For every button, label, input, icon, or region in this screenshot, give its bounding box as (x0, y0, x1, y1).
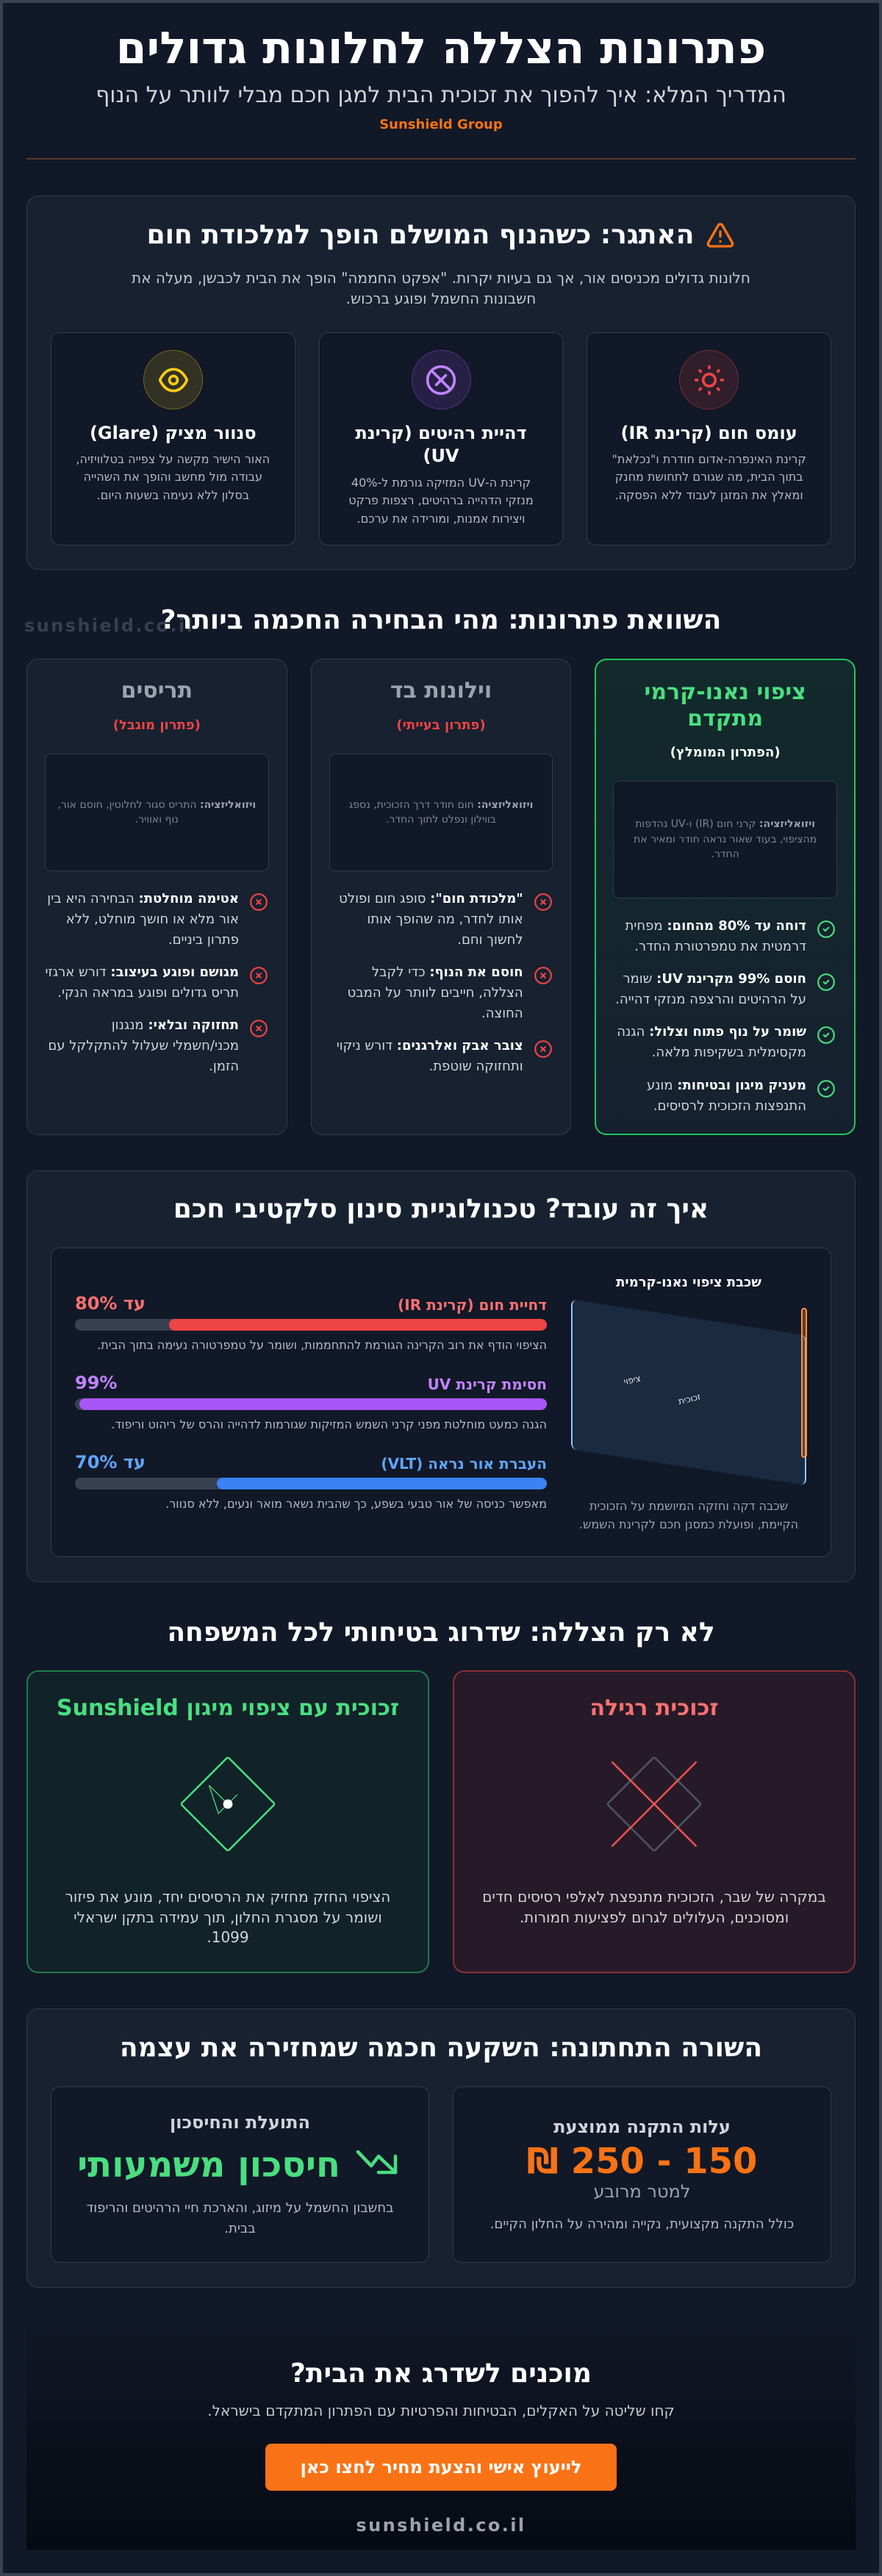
diagram caption: שכבה דקה וחזקה המיושמת על הזכוכית (589, 1499, 788, 1513)
visualization placeholder: ויזואליזציה: חום חודר דרך הזכוכית, נספג (349, 799, 533, 811)
metric: UV blocking (75, 1373, 547, 1431)
benefit (647, 1078, 835, 1114)
title: פתרונות הצללה לחלונות גדולים (116, 23, 766, 74)
metric text: מאפשר כניסה של אור טבעי בשפע, כך שהבית נשאר מואר ונעים, ללא סנוור. (165, 1497, 547, 1511)
visualization placeholder: ויזואליזציה: קרני חום (IR) ו-UV נהדפות (635, 818, 815, 830)
coating bar (801, 1308, 807, 1458)
benefit: מעניק מיגון ובטיחות: מונע (647, 1078, 806, 1093)
savings label: התועלת והחיסכון (170, 2112, 310, 2133)
website: sunshield.co.il (356, 2515, 526, 2536)
progress bar (75, 1478, 547, 1489)
drawback: תריס גדולים ופוגע במראה הנקי. (57, 985, 239, 1001)
benefit (625, 918, 835, 954)
card: heat load (587, 332, 831, 545)
icon: sun (679, 350, 739, 409)
drawback: לחשוך וחם. (457, 932, 523, 948)
benefit: מקסימלית בשקיפות מלאה. (652, 1045, 806, 1060)
panel text: ומסוכנים, העלולים לגרום לפציעות חמורות. (520, 1908, 789, 1926)
heading: safety: לא רק הצללה: שדרוג בטיחותי לכל המשפחה (167, 1617, 715, 1647)
metric label: חסימת קרינת UV (428, 1375, 547, 1393)
visualization placeholder: מהציפוי, בעוד שאור נראה חודר ומאיר את (634, 834, 817, 845)
column title: מתקדם (687, 706, 763, 731)
progress bar (75, 1319, 547, 1331)
drawback (47, 891, 268, 948)
column subtitle: (פתרון מוגבל) (113, 718, 201, 733)
metric text: הציפוי הודף את רוב הקרינה הגורמת להתחממות, ושומר על טמפרטורה נעימה בתוך הבית. (97, 1338, 547, 1352)
inner card (51, 1248, 831, 1557)
intro text (132, 269, 750, 307)
CTA heading: מוכנים לשדרג את הבית? (290, 2358, 592, 2389)
column subtitle: (פתרון בעייתי) (396, 718, 486, 733)
drawback (339, 891, 552, 948)
cost unit: למטר מרובע (594, 2181, 690, 2202)
icon: eye (143, 350, 203, 409)
column title: תריסים (121, 678, 193, 704)
label: glass: זכוכית (677, 1392, 702, 1406)
cost note: כולל התקנה מקצועית, נקייה ומהירה על החלון הקיים. (490, 2217, 794, 2232)
panel title: זכוכית רגילה (589, 1695, 719, 1721)
drawback: פתרון ביניים. (168, 932, 239, 948)
drawback: הזמן. (209, 1059, 239, 1074)
card text: בסלון ללא נעימה בשעות היום. (97, 488, 249, 502)
savings note (86, 2200, 394, 2236)
benefit: התנפצות הזכוכית לרסיסים. (653, 1098, 806, 1114)
benefit: על הרהיטים והרצפה מנזקי דהייה. (615, 992, 806, 1007)
divider (26, 158, 856, 160)
card title (355, 423, 527, 466)
benefit: דוחה עד 80% מהחום: מפחית (625, 918, 806, 934)
drawback: אור מלא או חושך מוחלט, ללא (66, 912, 239, 927)
drawback: החוצה. (481, 1006, 523, 1021)
drawback: תחזוקה ובלאי: מנגנון (112, 1017, 239, 1033)
savings note: בבית. (224, 2221, 256, 2236)
benefit (617, 1024, 835, 1060)
visualization placeholder: ויזואליזציה: התריס סגור לחלוטין, חוסם אור, (57, 799, 256, 811)
metric: heat rejection (75, 1293, 547, 1352)
column title: ציפוי נאנו-קרמי (645, 679, 806, 705)
icon: trending down (356, 2150, 397, 2175)
drawback: "מלכודת חום": סופג חום ופולט (339, 891, 523, 906)
panel text: 1099. (207, 1928, 249, 1946)
heading: ROI: השורה התחתונה: השקעה חכמה שמחזירה את עצמה (120, 2033, 762, 2063)
card text (348, 476, 534, 526)
metric label: העברת אור נראה (VLT) (381, 1455, 547, 1473)
watermark: sunshield.co.il (24, 615, 194, 636)
drawback: אותו לחדר, מה שהופך אותו (367, 912, 523, 927)
card text: ומאלץ את המזגן לעבוד ללא הפסקה. (615, 488, 803, 502)
card text: האור הישיר מקשה על צפייה בטלוויזיה, (76, 452, 270, 466)
benefit: שומר על נוף פתוח וצלול: הגנה (617, 1024, 806, 1040)
brand: Sunshield Group (379, 117, 503, 132)
panel text: הציפוי החזק מחזיק את הרסיסים יחד, מונע את פיזור (65, 1888, 390, 1906)
diagram caption (579, 1499, 798, 1531)
panel: regular glass (453, 1670, 856, 1973)
visualization placeholder: בווילון ונפלט לתוך החדר. (386, 814, 496, 826)
card text (612, 452, 806, 502)
card: glare (51, 332, 295, 545)
card title: סנוור מציק (Glare) (90, 423, 257, 443)
panel text: במקרה של שבר, הזכוכית מתנפצת לאלפי רסיסים חדים (482, 1888, 826, 1906)
panel text (65, 1888, 390, 1946)
card title: דהיית רהיטים (קרינת (355, 423, 527, 443)
drawback (337, 1038, 552, 1074)
heading: threat (147, 220, 734, 250)
panel: curtains (311, 659, 571, 1135)
heading: technology: איך זה עובד? טכנולוגיית סינון סלקטיבי חכם (173, 1194, 709, 1224)
drawback (348, 965, 552, 1021)
diagram: glass layers (571, 1300, 807, 1485)
card text: קרינת האינפרה-אדום חודרת ו"נכלאת" (612, 452, 806, 466)
metric label: דחיית חום (קרינת IR) (398, 1296, 547, 1314)
intro text: חלונות גדולים מכניסים אור, אך גם בעיות יקרות. "אפקט החממה" הופך את הבית לכבשן, מעלה את (132, 269, 750, 287)
panel: call to action (26, 2311, 856, 2550)
diagram title: שכבת ציפוי נאנו-קרמית (616, 1275, 761, 1289)
cost label: עלות התקנה ממוצעת (553, 2117, 731, 2137)
progress bar (75, 1398, 547, 1410)
drawback: מכני/חשמלי שעלול להתקלקל עם (48, 1038, 239, 1053)
savings value: חיסכון משמעותי (77, 2144, 340, 2186)
icon: intact glass (181, 1757, 275, 1851)
card title: UV) (423, 446, 459, 466)
column title (645, 679, 806, 731)
card text: עבודה מול מחשב והופך את השהייה (84, 470, 262, 484)
icon: shattered glass (607, 1757, 701, 1851)
card text: מנזקי הדהייה ברהיטים, רצפות פרקט (348, 493, 534, 507)
card title: עומס חום (קרינת IR) (621, 423, 797, 443)
drawback: אטימה מוחלטת: הבחירה היא בין (47, 891, 239, 906)
metric text: הגנה כמעט מוחלטת מפני קרני השמש המזיקות שגורמות לדהייה והרס של ריהוט וריפוד. (111, 1417, 547, 1431)
card: cost (453, 2086, 831, 2263)
metric: visible light (75, 1452, 547, 1511)
drawback: צובר אבק ואלרגנים: דורש ניקוי (337, 1038, 523, 1053)
CTA button: לייעוץ אישי והצעת מחיר לחצו כאן (301, 2457, 581, 2477)
header (26, 23, 856, 160)
visualization placeholder (613, 781, 837, 898)
drawback (48, 1017, 268, 1074)
cost value: 150 - 250 ₪ (527, 2141, 757, 2182)
card: savings (51, 2086, 429, 2263)
visualization placeholder (45, 754, 269, 871)
panel: threat (26, 196, 856, 570)
card text: קרינת ה-UV המזיקה גורמת ל-40% (351, 476, 531, 490)
panel: ROI (26, 2008, 856, 2288)
metric value: עד 80% (75, 1293, 146, 1314)
drawback: הצללה, חייבים לוותר על המבט (348, 985, 523, 1001)
diagram caption: הקיימת, ופועלת כמסנן חכם לקרינת השמש. (579, 1517, 798, 1531)
drawback: ותחזוקה שוטפת. (429, 1059, 523, 1074)
subtitle: המדריך המלא: איך להפוך את זכוכית הבית למגן חכם מבלי לוותר על הנוף (96, 82, 786, 108)
panel: nano-ceramic coating (recommended) (595, 659, 856, 1135)
panel text (482, 1888, 826, 1926)
icon: uv block (412, 350, 471, 409)
visualization placeholder: החדר. (711, 848, 739, 860)
icon: warning triangle (707, 223, 734, 248)
card text: בתוך הבית, מה שגורם לתחושת מחנק (615, 470, 803, 484)
card text: ויצירות אמנות, ומורידה את ערכם. (356, 512, 525, 526)
label: coating: ציפוי (623, 1373, 642, 1387)
panel: shutters (26, 659, 287, 1135)
drawback (45, 965, 268, 1001)
panel text: ושומר על מסגרת החלון, תוך עמידה בתקן ישראלי (74, 1908, 382, 1926)
drawback: חוסם את הנוף: כדי לקבל (372, 965, 523, 980)
benefit: חוסם 99% מקרינת UV: שומר (623, 971, 806, 987)
visualization placeholder: נוף ואוויר. (135, 814, 179, 826)
heading: comparison: השוואת פתרונות: מהי הבחירה החכמה ביותר? (161, 605, 721, 635)
CTA text: קחו שליטה על האקלים, הבטיחות והפרטיות עם הפתרון המתקדם בישראל. (207, 2402, 675, 2419)
column subtitle: (הפתרון המומלץ) (670, 745, 781, 760)
panel: coated glass (26, 1670, 429, 1973)
benefit (615, 971, 835, 1007)
panel: technology (26, 1170, 856, 1582)
drawback: מגושם ופוגע בעיצוב: דורש ארגזי (45, 965, 239, 980)
metric value: עד 70% (75, 1452, 146, 1473)
card text (76, 452, 270, 502)
heading text: האתגר: כשהנוף המושלם הופך למלכודת חום (147, 220, 694, 250)
glass pane (571, 1299, 806, 1485)
card: furniture fading (319, 332, 563, 545)
savings note: בחשבון החשמל על מיזוג, והארכת חיי הרהיטים והריפוד (86, 2200, 394, 2216)
visualization placeholder (329, 754, 553, 871)
benefit: דרמטית את טמפרטורת החדר. (634, 939, 806, 954)
column title: וילונות בד (390, 678, 492, 704)
metric value: 99% (75, 1373, 117, 1393)
CTA button (265, 2444, 617, 2491)
panel title: זכוכית עם ציפוי מיגון Sunshield (57, 1695, 399, 1721)
intro text: חשבונות החשמל ופוגע ברכוש. (346, 290, 536, 307)
